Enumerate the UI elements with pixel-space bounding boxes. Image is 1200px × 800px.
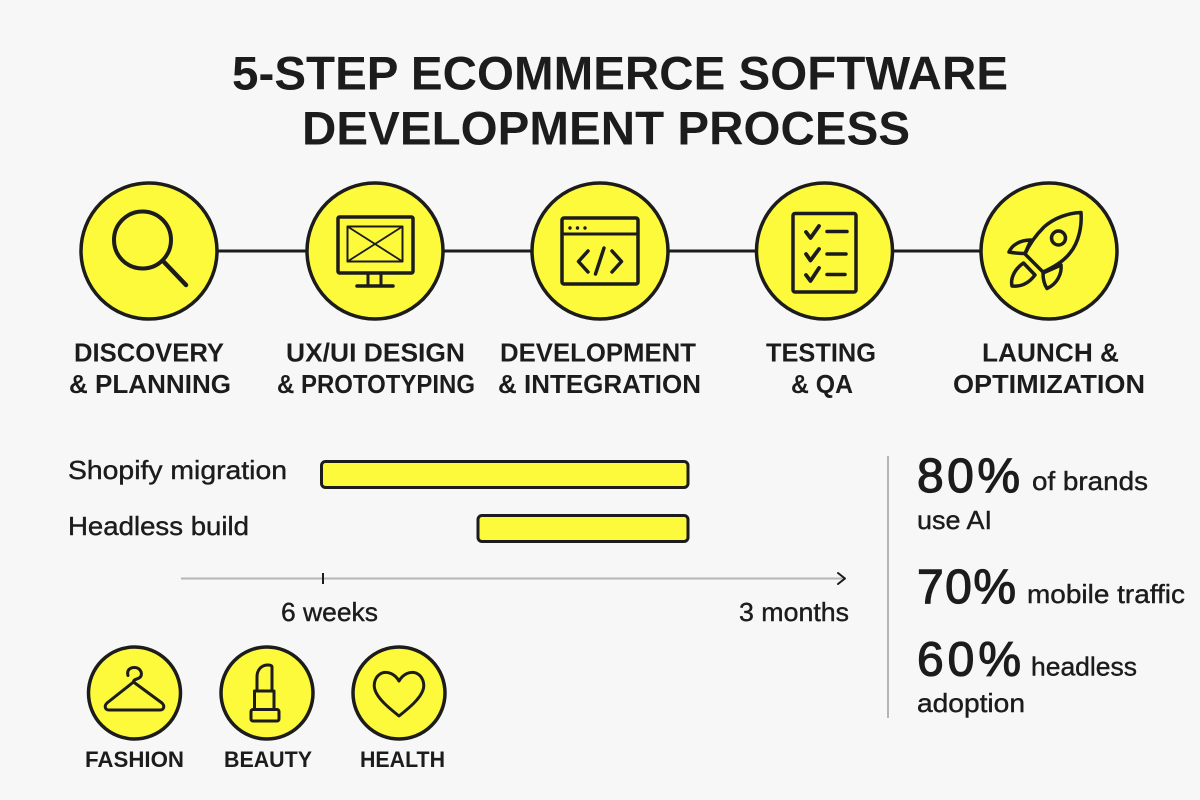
title: 5-STEP ECOMMERCE SOFTWARE [232, 48, 1008, 100]
row: shopify migration [68, 455, 688, 488]
icon: heart [353, 647, 445, 739]
row: headless build [68, 511, 688, 542]
icon: rocket [981, 183, 1117, 319]
timeline axis [181, 573, 845, 584]
label: development and integration: DEVELOPMENT [500, 338, 696, 368]
label: discovery and planning: DISCOVERY [74, 338, 224, 368]
label: development and integration: & INTEGRATION [498, 369, 701, 399]
timeline chart [68, 455, 849, 627]
icon: magnifying glass [81, 183, 217, 319]
stat: 60 percent headless adoption: 60% [917, 634, 1021, 686]
stat: 80 percent of brands use AI: 80% [917, 450, 1020, 503]
industry: beauty [221, 647, 313, 772]
axis label: 3 months: 3 months [739, 597, 849, 627]
label: testing and qa: & QA [791, 369, 853, 399]
step 2: ux/ui design and prototyping [277, 183, 475, 399]
label: ux/ui design and prototyping: UX/UI DESIGN [286, 338, 465, 368]
row: headless build: Headless build [68, 511, 249, 541]
process connector line [215, 250, 985, 252]
label: testing and qa [766, 338, 876, 399]
label: ux/ui design and prototyping: & PROTOTYPING [277, 369, 475, 399]
stat: 80 percent of brands use AI [917, 450, 1148, 535]
stat: 80 percent of brands use AI: use AI [917, 505, 992, 535]
row: shopify migration: Shopify migration [68, 455, 287, 485]
label: launch and optimization: LAUNCH & [982, 338, 1119, 368]
stat: 60 percent headless adoption: headless [1031, 652, 1137, 682]
label: fashion: FASHION [85, 747, 184, 772]
icon: browser code window [532, 183, 668, 319]
label: launch and optimization: OPTIMIZATION [953, 369, 1145, 399]
step 1: discovery and planning [69, 183, 231, 399]
axis label: 6 weeks: 6 weeks [281, 597, 378, 627]
icon: monitor wireframe [307, 183, 443, 319]
step 3: development and integration [498, 183, 701, 399]
step 5: launch and optimization [953, 183, 1145, 399]
stat: 70 percent mobile traffic [917, 561, 1185, 614]
label: testing and qa: TESTING [766, 338, 876, 368]
stat: 60 percent headless adoption [917, 634, 1137, 718]
icon: lipstick [221, 647, 313, 739]
icon: hanger [88, 647, 180, 739]
stat: 70 percent mobile traffic: mobile traffic [1027, 579, 1185, 609]
title: DEVELOPMENT PROCESS [302, 102, 910, 156]
label: ux/ui design and prototyping [277, 338, 475, 399]
label: beauty: BEAUTY [224, 747, 312, 772]
stat: 70 percent mobile traffic: 70% [917, 561, 1016, 614]
step 4: testing and qa [756, 183, 892, 399]
label: discovery and planning: & PLANNING [69, 369, 231, 399]
title [232, 48, 1008, 156]
industry: fashion [85, 647, 184, 772]
icon: checklist [756, 183, 892, 319]
stats divider [887, 456, 889, 718]
label: development and integration [498, 338, 701, 399]
stat: 80 percent of brands use AI: of brands [1032, 466, 1148, 496]
stat: 60 percent headless adoption: adoption [917, 688, 1025, 718]
label: health: HEALTH [360, 747, 445, 772]
label: discovery and planning [69, 338, 231, 399]
industry: health [353, 647, 445, 772]
label: launch and optimization [953, 338, 1145, 399]
